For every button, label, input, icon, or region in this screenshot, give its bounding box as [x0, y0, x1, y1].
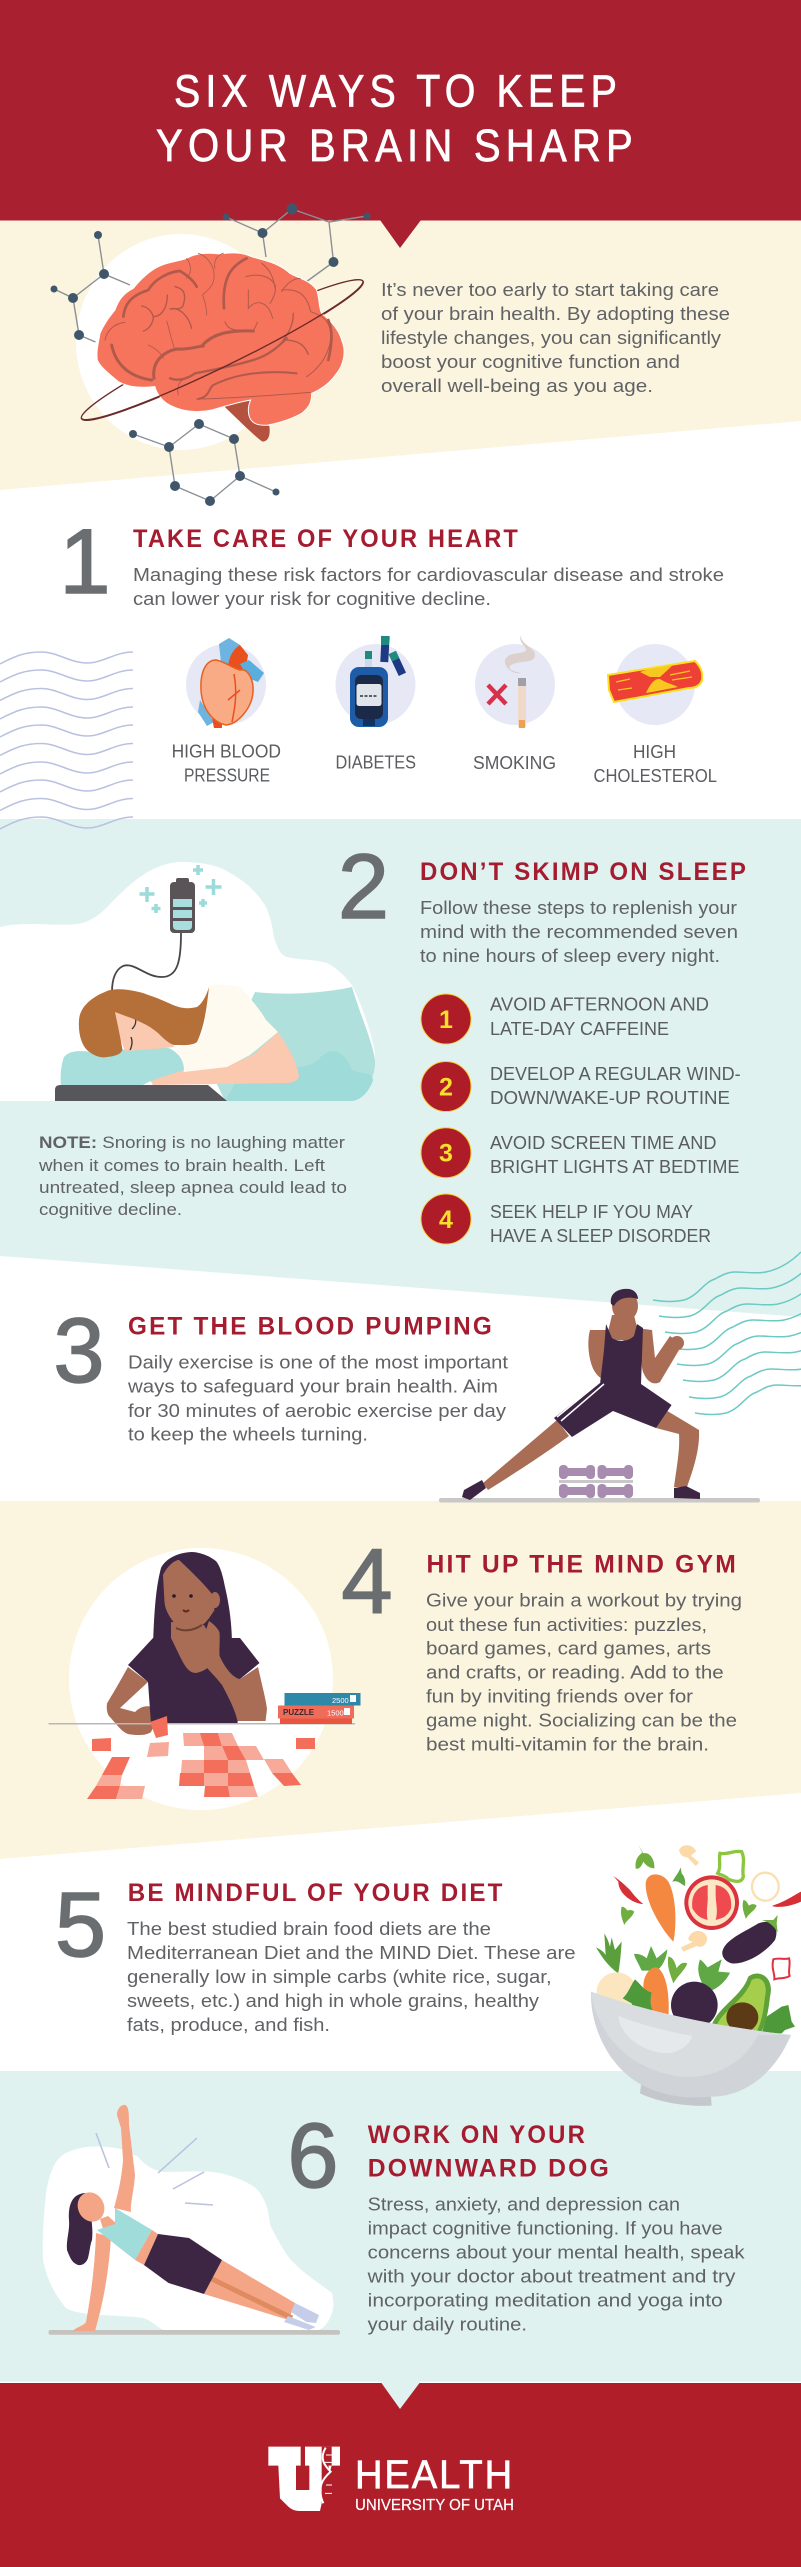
wave pattern left: [0, 652, 133, 829]
section 3 body: ways to safeguard your brain health. Aim: [127, 1376, 498, 1397]
white blob: [43, 2147, 333, 2330]
molecule network: [50, 204, 370, 506]
section 6 number: 6: [287, 2105, 339, 2207]
head: [73, 2188, 109, 2226]
puzzle boxes: [278, 1693, 360, 1724]
section 6 body: concerns about your mental health, speak: [368, 2242, 745, 2263]
section 3 body: Daily exercise is one of the most important: [128, 1352, 508, 1373]
greens and produce in bowl: [596, 1933, 795, 2034]
section 6 heading: WORK ON YOUR: [368, 2121, 587, 2149]
mattress: [55, 1085, 227, 1101]
section 2 body: to nine hours of sleep every night.: [420, 945, 720, 966]
face: [112, 1010, 174, 1051]
note: NOTE: Snoring is no laughing matter: [39, 1134, 346, 1152]
section 5 body: fats, produce, and fish.: [127, 2014, 330, 2035]
header banner: [0, 0, 801, 248]
dumbbells: [559, 1465, 633, 1498]
puzzle boxes: PUZZLE: [283, 1708, 315, 1717]
legs: [204, 2260, 295, 2320]
neck and chest: [171, 1622, 220, 1673]
label: high blood pressure: PRESSURE: [184, 766, 270, 786]
step 2: 2: [439, 1074, 453, 1102]
battery: [112, 878, 195, 992]
section 6 body: incorporating meditation and yoga into: [368, 2290, 723, 2311]
face: [163, 1560, 214, 1627]
label: high cholesterol: CHOLESTEROL: [594, 766, 717, 786]
icon: clogged artery: [608, 644, 702, 725]
section 6 body: Stress, anxiety, and depression can: [368, 2194, 680, 2215]
section 3 body: for 30 minutes of aerobic exercise per day: [128, 1400, 507, 1421]
logo: U with DNA: [268, 2447, 340, 2511]
label: high blood pressure: HIGH BLOOD: [172, 742, 281, 762]
icon: glucose meter: [336, 636, 416, 727]
puzzle pieces: [87, 1716, 315, 1799]
note: cognitive decline.: [39, 1201, 182, 1219]
puzzle woman illustration: [48, 1548, 360, 1810]
step 1: LATE-DAY CAFFEINE: [490, 1019, 669, 1039]
section 6 body: your daily routine.: [368, 2314, 527, 2335]
section 1 body: can lower your risk for cognitive decline.: [133, 588, 491, 609]
step 3: BRIGHT LIGHTS AT BEDTIME: [490, 1157, 740, 1177]
label: smoking: SMOKING: [473, 753, 556, 773]
step 4: 4: [439, 1206, 453, 1234]
shorts: [144, 2234, 222, 2294]
step 1: AVOID AFTERNOON AND: [490, 995, 709, 1015]
note: [38, 1134, 347, 1219]
falling vegetables: [613, 1845, 801, 1983]
left arm: [107, 1667, 154, 1735]
section 2 body: [420, 897, 738, 966]
section 4 number: 4: [341, 1531, 393, 1633]
section 4 body: Give your brain a workout by trying: [426, 1590, 742, 1611]
step 4: [421, 1194, 711, 1246]
title: SIX WAYS TO KEEP: [174, 66, 622, 117]
section 3 body: to keep the wheels turning.: [128, 1424, 368, 1445]
section 1 heading: TAKE CARE OF YOUR HEART: [133, 525, 520, 553]
plus signs: [140, 865, 222, 913]
supporting arm: [73, 2233, 111, 2331]
section 5 heading: BE MINDFUL OF YOUR DIET: [128, 1879, 505, 1907]
pillow: [61, 1047, 184, 1087]
intro text: overall well-being as you age.: [381, 375, 653, 396]
note: untreated, sleep apnea could lead to: [39, 1179, 347, 1197]
icon: heart: [186, 638, 266, 728]
legs: [483, 1420, 569, 1490]
logo wordmark: UNIVERSITY OF UTAH: [355, 2497, 514, 2514]
section 3 body: [127, 1352, 508, 1445]
intro text: It’s never too early to start taking care: [381, 279, 719, 300]
label: high cholesterol: HIGH: [633, 742, 676, 762]
section 5 body: Mediterranean Diet and the MIND Diet. These are: [127, 1942, 576, 1963]
icon: cigarette: [475, 635, 555, 728]
table line: [48, 1723, 355, 1724]
bowl: [591, 1992, 791, 2106]
floor: [48, 2330, 340, 2335]
section 4 body: [426, 1590, 742, 1755]
footer banner: [0, 2381, 801, 2567]
section 4 body: fun by inviting friends over for: [426, 1686, 693, 1707]
shoes: [462, 1480, 486, 1500]
step 1: 1: [439, 1006, 453, 1034]
section 3 number: 3: [53, 1300, 105, 1402]
sleeping woman illustration: [0, 862, 375, 1101]
logo wordmark: [355, 2453, 514, 2514]
shorts: [554, 1382, 672, 1437]
salad bowl illustration: [591, 1845, 801, 2106]
intro text: lifestyle changes, you can significantly: [381, 327, 722, 348]
shirt: [128, 1638, 260, 1724]
step 3: AVOID SCREEN TIME AND: [490, 1133, 716, 1153]
step 2: DOWN/WAKE-UP ROUTINE: [490, 1088, 730, 1108]
motion lines: [96, 2133, 213, 2205]
section 2 body: mind with the recommended seven: [420, 921, 738, 942]
section 4 body: best multi-vitamin for the brain.: [426, 1734, 709, 1755]
puzzle boxes: 2500: [332, 1696, 349, 1705]
section 6 heading: [368, 2121, 611, 2183]
section 3 heading: GET THE BLOOD PUMPING: [128, 1313, 494, 1341]
arms and neck: [588, 1330, 636, 1379]
logo wordmark: HEALTH: [355, 2453, 514, 2497]
section 6 body: [367, 2194, 745, 2335]
shirt: [176, 985, 278, 1072]
hair: [153, 1552, 232, 1645]
section 1 body: Managing these risk factors for cardiovascular disease and stroke: [133, 564, 724, 585]
section 4 body: game night. Socializing can be the: [426, 1710, 737, 1730]
section 4 body: and crafts, or reading. Add to the: [426, 1662, 724, 1683]
hair: [67, 2193, 92, 2265]
section 2 body: Follow these steps to replenish your: [420, 897, 737, 918]
intro text: boost your cognitive function and: [381, 351, 680, 372]
socks: [291, 2303, 319, 2323]
label: high blood pressure: [172, 742, 281, 786]
section 6 body: impact cognitive functioning. If you have: [368, 2218, 723, 2239]
section 4 body: out these fun activities: puzzles,: [426, 1614, 707, 1635]
intro text: [381, 279, 730, 396]
bedding: [215, 987, 375, 1101]
title: YOUR BRAIN SHARP: [156, 120, 638, 171]
section 1 number: 1: [59, 511, 111, 613]
section 5 number: 5: [55, 1874, 106, 1976]
section 6 heading: DOWNWARD DOG: [368, 2155, 611, 2183]
section 2 number: 2: [338, 836, 389, 938]
section 4 body: board games, card games, arts: [426, 1638, 711, 1658]
wave pattern right: [653, 1252, 801, 1414]
step 4: SEEK HELP IF YOU MAY: [490, 1202, 693, 1222]
step 1: [421, 994, 709, 1044]
brain illustration with molecules: [50, 204, 370, 506]
exercising man illustration: [439, 1289, 760, 1502]
step 2: [421, 1062, 741, 1112]
tank top: [600, 1324, 643, 1384]
step 3: 3: [439, 1140, 453, 1168]
top: [97, 2208, 152, 2260]
title: [156, 66, 638, 171]
section 5 body: sweets, etc.) and high in whole grains, healthy: [127, 1990, 540, 2011]
yoga woman illustration: [43, 2105, 340, 2335]
section 5 body: generally low in simple carbs (white rice, sugar,: [127, 1966, 552, 1987]
hair: [79, 987, 209, 1057]
white blob: [0, 862, 375, 1101]
step 2: DEVELOP A REGULAR WIND-: [490, 1064, 741, 1084]
note: when it comes to brain health. Left: [38, 1157, 325, 1175]
step 4: HAVE A SLEEP DISORDER: [490, 1226, 711, 1246]
arm: [148, 1032, 299, 1085]
section 6 body: with your doctor about treatment and try: [367, 2266, 736, 2287]
label: diabetes: DIABETES: [336, 753, 416, 773]
step 3: [421, 1128, 740, 1178]
section 5 body: The best studied brain food diets are the: [127, 1918, 491, 1939]
section 1 body: [133, 564, 724, 609]
label: high cholesterol: [594, 742, 717, 786]
hand and right arm: [202, 1621, 267, 1721]
section 4 heading: HIT UP THE MIND GYM: [426, 1551, 738, 1579]
section 2 heading: DON’T SKIMP ON SLEEP: [420, 858, 748, 886]
section 5 body: [127, 1918, 576, 2035]
puzzle boxes: 1500: [327, 1708, 344, 1718]
head: [612, 1291, 638, 1321]
raised arm: [114, 2105, 135, 2212]
intro text: of your brain health. By adopting these: [381, 303, 730, 324]
